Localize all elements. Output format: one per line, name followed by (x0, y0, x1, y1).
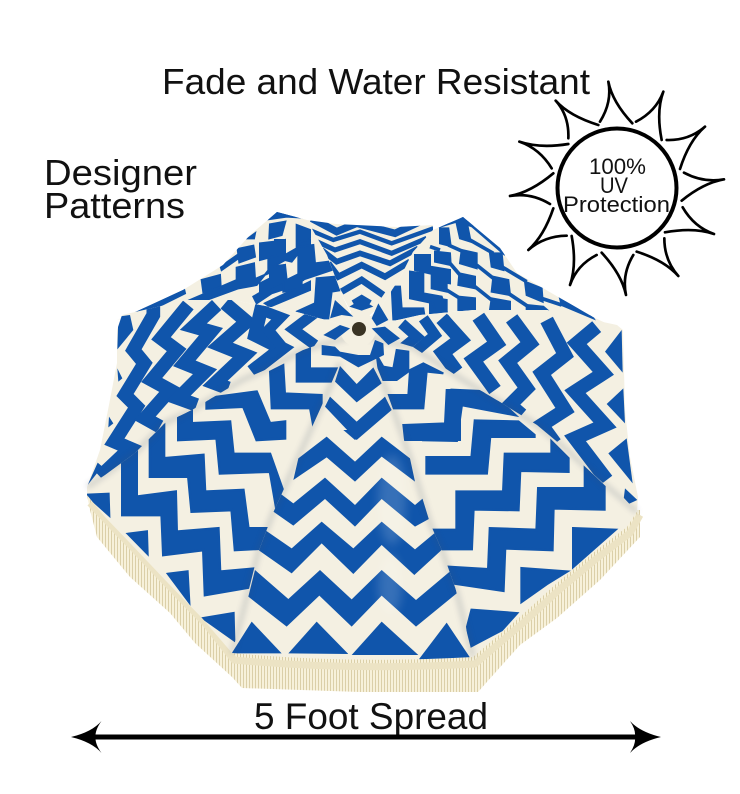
near hub stairs (270, 348, 460, 440)
hub (322, 299, 400, 367)
panel: upper right (371, 217, 603, 325)
panel: top (307, 220, 433, 316)
label: 5 foot spread: 5 Foot Spread (254, 696, 488, 737)
fringe (87, 495, 640, 692)
panel: right (374, 310, 638, 512)
sun label (563, 154, 670, 217)
rib shading (87, 335, 637, 657)
bottom panel highlights (378, 455, 406, 615)
lower left chevrons (87, 392, 285, 640)
arrow: spread width (71, 721, 661, 753)
sun rays (510, 82, 724, 295)
panel: left (87, 300, 342, 487)
panel: upper left (118, 212, 350, 324)
heading: designer patterns: Designer (44, 152, 197, 193)
icon: sun badge (510, 82, 724, 295)
lower right chevrons (423, 390, 615, 647)
heading: fade and water resistant: Fade and Water Resistant (162, 61, 590, 102)
sun label: Protection (563, 192, 670, 217)
sun label: UV (600, 173, 628, 198)
heading: designer patterns (44, 152, 197, 226)
umbrella canopy (80, 205, 645, 692)
panel: bottom (232, 366, 471, 660)
sun disc (558, 128, 676, 248)
heading: designer patterns: Patterns (44, 185, 185, 226)
panels: lower left and lower right (80, 330, 645, 665)
sun label: 100% (589, 154, 646, 179)
